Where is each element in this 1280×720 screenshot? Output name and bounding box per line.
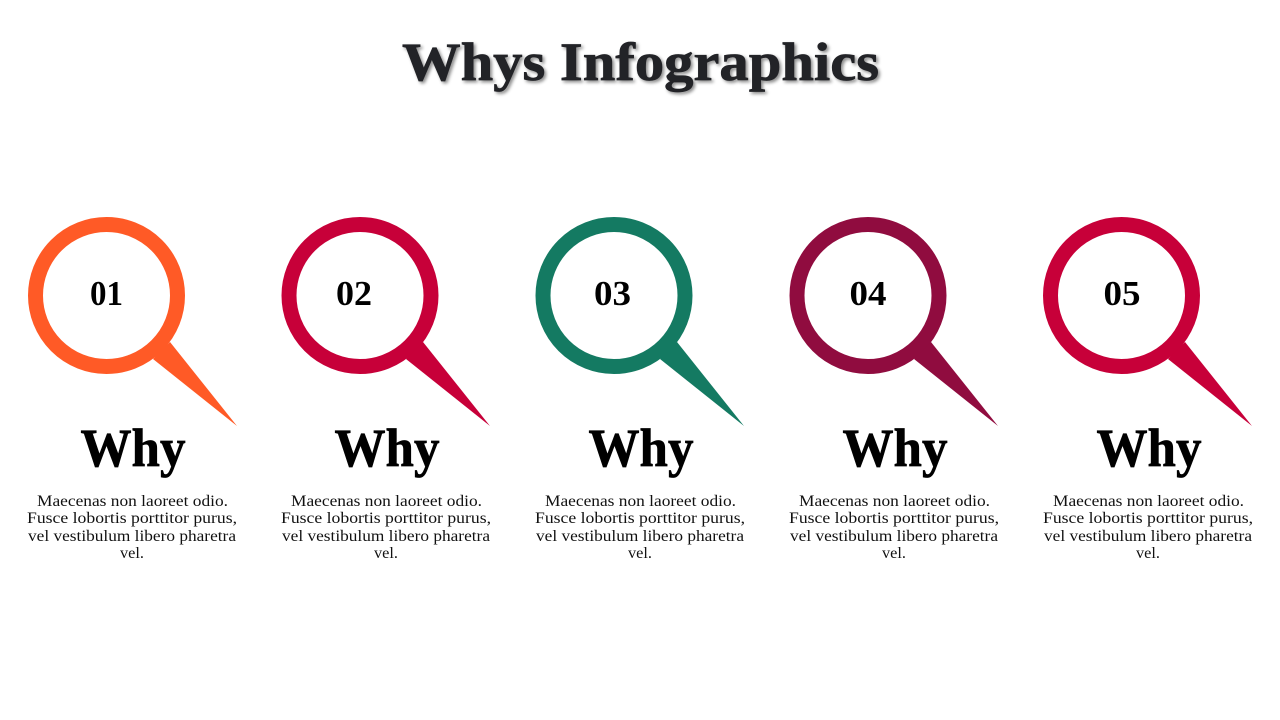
text block 05: vel. [1136,545,1160,562]
text block 01: vel. [120,545,144,562]
text block 02: vel vestibulum libero pharetra [282,528,490,545]
text block 01: Fusce lobortis porttitor purus, [27,510,237,527]
text block 05: vel vestibulum libero pharetra [1044,528,1252,545]
text block 03: Maecenas non laoreet odio. [545,493,736,510]
text block 01: Maecenas non laoreet odio. [37,493,228,510]
text block 03 [535,493,745,562]
number 05: 05 [1104,274,1140,313]
icon: magnifier 01 [36,224,237,426]
number 04: 04 [850,274,886,313]
text block 02: Fusce lobortis porttitor purus, [281,510,491,527]
text block 04: Maecenas non laoreet odio. [799,493,990,510]
text block 05 [1043,493,1253,562]
text block 04: vel. [882,545,906,562]
text block 04: Fusce lobortis porttitor purus, [789,510,999,527]
heading: why 01: Why [80,418,186,478]
heading: why 03: Why [588,418,694,478]
heading: why 04: Why [842,418,948,478]
text block 05: Maecenas non laoreet odio. [1053,493,1244,510]
panel: why 03 [535,224,745,562]
number 02: 02 [336,274,372,313]
number 03: 03 [594,274,631,313]
icon: magnifier 05 [1050,224,1252,426]
icon: magnifier 03 [543,224,744,426]
heading: why 05: Why [1096,418,1202,478]
panel: why 02 [281,224,491,562]
number 01: 01 [90,274,123,313]
text block 02: Maecenas non laoreet odio. [291,493,482,510]
icon: magnifier 02 [289,224,490,426]
text block 04 [789,493,999,562]
text block 04: vel vestibulum libero pharetra [790,528,998,545]
text block 03: vel vestibulum libero pharetra [536,528,744,545]
text block 03: vel. [628,545,652,562]
text block 01 [27,493,237,562]
text block 05: Fusce lobortis porttitor purus, [1043,510,1253,527]
text block 02: vel. [374,545,398,562]
panel: why 04 [789,224,999,562]
text block 01: vel vestibulum libero pharetra [28,528,236,545]
panel: why 01 [27,224,237,562]
title: Whys Infographics [402,32,879,92]
text block 03: Fusce lobortis porttitor purus, [535,510,745,527]
panel: why 05 [1043,224,1253,562]
text block 02 [281,493,491,562]
icon: magnifier 04 [797,224,998,426]
heading: why 02: Why [334,418,440,478]
